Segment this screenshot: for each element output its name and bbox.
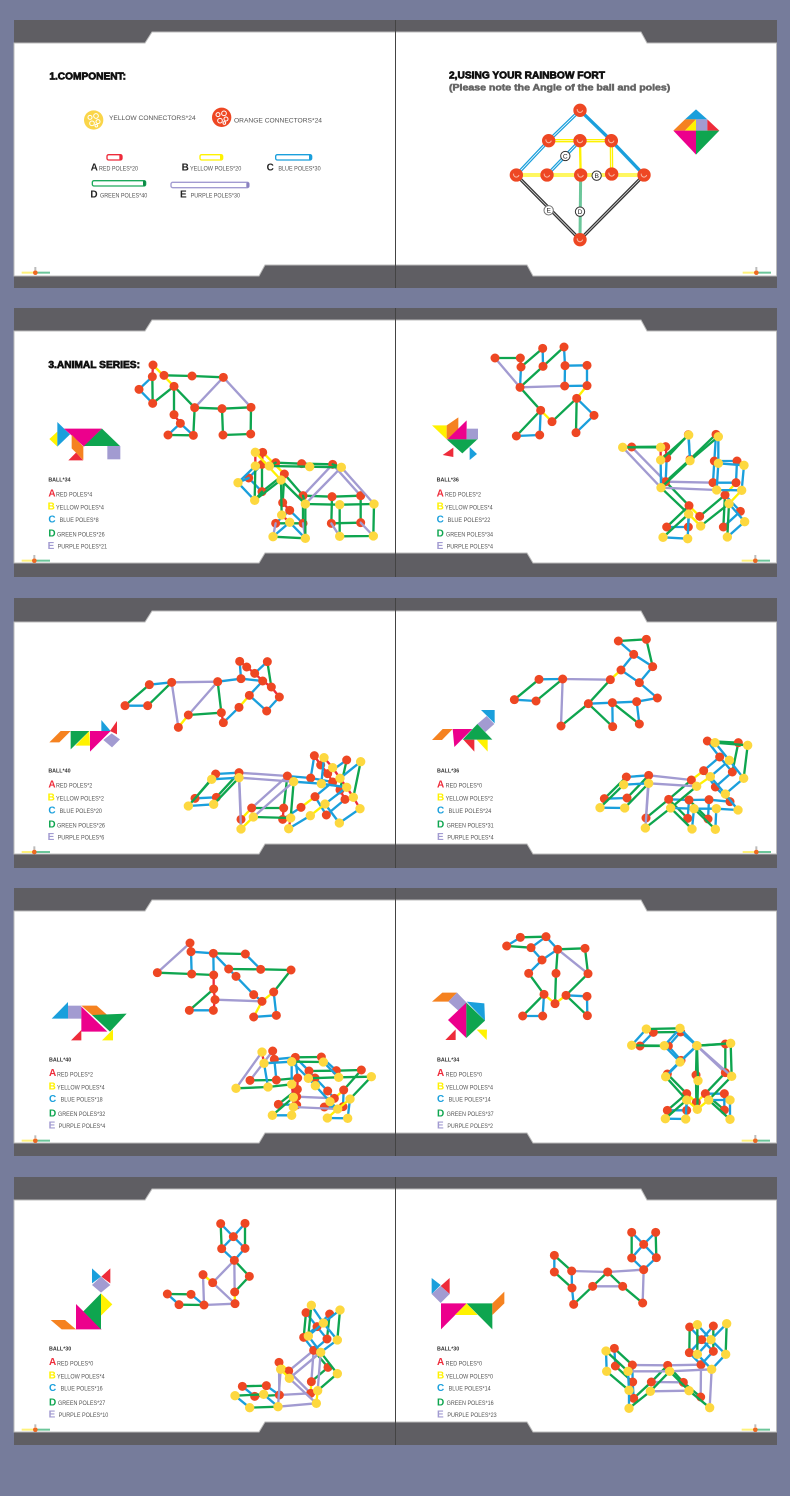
parts list: YELLOW POLES*4 (57, 1374, 105, 1380)
pole B yellow (200, 155, 223, 160)
page marker (22, 846, 50, 854)
parts list: GREEN POLES*16 (447, 1401, 494, 1407)
parts list: BLUE POLES*22 (448, 518, 491, 524)
parts list: BALL*34 (48, 478, 71, 484)
parts list: GREEN POLES*27 (58, 1401, 106, 1407)
parts list: BALL*40 (49, 1057, 71, 1063)
parts list: D (437, 1397, 444, 1408)
label: yellow connectors: YELLOW CONNECTORS*24 (109, 115, 196, 122)
parts list: C (49, 1383, 56, 1394)
panel: bird (432, 347, 770, 563)
page marker (742, 555, 770, 563)
label: orange connectors: ORANGE CONNECTORS*24 (234, 117, 322, 124)
flat model: parrot (507, 937, 588, 1016)
icon: tangram square (673, 109, 719, 155)
3D model: bird (623, 434, 745, 539)
label B: YELLOW POLES*20 (190, 166, 242, 172)
panel: 2 using your rainbow fort (449, 71, 771, 275)
label B: B (182, 163, 189, 174)
page marker (743, 267, 771, 275)
icon: tangram fox (432, 710, 495, 752)
page frame row 5 (14, 1177, 777, 1445)
parts list: B (437, 502, 444, 513)
3D model: wolf (188, 756, 361, 829)
parts list: BLUE POLES*14 (449, 1098, 491, 1104)
3D model: bear (238, 452, 374, 538)
icon: tangram goose (52, 1002, 127, 1040)
parts list: GREEN POLES*37 (447, 1112, 494, 1118)
parts list: BALL*34 (437, 1057, 459, 1063)
parts list: BLUE POLES*20 (60, 809, 103, 815)
parts list: BLUE POLES*24 (449, 809, 492, 815)
parts list: A (437, 488, 444, 499)
flat model: bear (139, 365, 251, 435)
parts list: PURPLE POLES*2 (447, 1124, 494, 1130)
parts list: PURPLE POLES*4 (447, 835, 494, 841)
parts list (437, 769, 494, 843)
diagram: square construction (514, 109, 647, 242)
parts list: BLUE POLES*16 (61, 1387, 103, 1393)
parts list: A (48, 779, 56, 790)
parts list: BALL*36 (437, 769, 459, 775)
label A: RED POLES*20 (99, 166, 139, 172)
label D (90, 190, 148, 201)
page frame row 2 (14, 308, 777, 577)
parts list: BALL*30 (437, 1346, 459, 1352)
parts list (49, 1346, 109, 1421)
parts list: A (48, 488, 56, 499)
flat model: goose (157, 943, 291, 1017)
callout letters: D (578, 209, 583, 216)
page marker (22, 267, 50, 275)
label A: A (91, 163, 98, 174)
parts list: YELLOW POLES*4 (445, 505, 493, 511)
parts list: D (437, 1108, 444, 1119)
pole A red (107, 155, 122, 160)
parts list: D (49, 1397, 56, 1408)
pole D green (92, 181, 146, 186)
parts list: E (437, 541, 444, 552)
parts list (437, 478, 494, 552)
parts list: BALL*40 (48, 769, 71, 775)
parts list: D (48, 820, 56, 831)
parts list: E (48, 832, 55, 843)
3D model: fox (600, 741, 748, 829)
parts list: RED POLES*2 (445, 493, 482, 499)
parts list: A (437, 779, 444, 790)
parts list: E (437, 1121, 444, 1132)
flat model: bird (495, 347, 594, 436)
parts list: YELLOW POLES*4 (57, 1085, 105, 1091)
label D: D (90, 190, 98, 201)
icon: tangram sitting cat (51, 1268, 112, 1329)
page marker (22, 555, 50, 563)
parts list: PURPLE POLES*10 (59, 1413, 109, 1419)
parts list (437, 1057, 494, 1132)
icon: tangram bear (49, 422, 120, 460)
label A (91, 163, 139, 174)
parts list: A (49, 1357, 56, 1368)
parts list: C (437, 805, 444, 816)
panel: wolf (22, 661, 361, 854)
panel: 3 animal series bear (22, 360, 374, 563)
panel: goose (22, 943, 371, 1143)
parts list: E (437, 1410, 444, 1421)
heading: animal series: 3.ANIMAL SERIES: (48, 360, 140, 371)
callout letters: B (594, 173, 599, 180)
parts list: E (49, 1410, 56, 1421)
parts list (48, 769, 106, 843)
parts list: E (49, 1121, 56, 1132)
parts list: PURPLE POLES*4 (59, 1124, 106, 1130)
flat model: wolf (125, 661, 279, 727)
icon: yellow connector (84, 110, 103, 130)
parts list: GREEN POLES*32 (58, 1112, 106, 1118)
page frame row 1 (14, 20, 777, 288)
icon: tangram standing cat (432, 1278, 504, 1329)
parts list: C (437, 514, 444, 525)
parts list: B (437, 1082, 444, 1093)
parts list: PURPLE POLES*21 (58, 544, 108, 550)
3D model: goose (236, 1051, 371, 1118)
parts list: C (49, 1094, 56, 1105)
parts list: RED POLES*2 (56, 784, 93, 790)
flat model: fox (514, 639, 657, 727)
callout letters (544, 151, 601, 216)
parts list: A (49, 1068, 56, 1079)
panel: standing cat (432, 1232, 770, 1432)
parts list: B (48, 793, 55, 804)
parts list (48, 478, 108, 552)
parts list: YELLOW POLES*2 (56, 796, 105, 802)
icon: tangram parrot (432, 993, 487, 1040)
parts list: GREEN POLES*26 (57, 532, 105, 538)
parts list: GREEN POLES*34 (446, 532, 494, 538)
parts list: D (437, 820, 444, 831)
label C (267, 163, 321, 174)
3D model: parrot (632, 1028, 732, 1119)
pole C blue (276, 155, 312, 160)
parts list: B (437, 1371, 444, 1382)
parts list: RED POLES*4 (56, 493, 93, 499)
parts list: C (48, 805, 56, 816)
label C: BLUE POLES*30 (278, 166, 321, 172)
callout letters: C (563, 153, 568, 160)
icon: tangram wolf (49, 720, 120, 752)
parts list: C (437, 1094, 444, 1105)
pole E purple (171, 182, 249, 188)
label C: C (267, 163, 274, 174)
page marker (22, 1424, 50, 1432)
subheading: angle note: (Please note the Angle of the ball and poles) (449, 82, 670, 92)
panel: fox (432, 639, 771, 854)
parts list: RED POLES*2 (57, 1072, 94, 1078)
label E: PURPLE POLES*30 (191, 194, 241, 200)
parts list: C (437, 1383, 444, 1394)
parts list: YELLOW POLES*4 (56, 505, 105, 511)
parts list: A (437, 1357, 444, 1368)
panel: sitting cat (22, 1223, 340, 1432)
parts list: D (49, 1108, 56, 1119)
page marker (742, 1424, 770, 1432)
parts list: YELLOW POLES*0 (446, 1374, 494, 1380)
parts list (437, 1346, 497, 1421)
parts list (49, 1057, 106, 1132)
parts list: YELLOW POLES*2 (446, 796, 494, 802)
parts list: BALL*30 (49, 1346, 71, 1352)
heading: using: 2,USING YOUR RAINBOW FORT (449, 71, 605, 82)
parts list: E (437, 832, 444, 843)
parts list: D (437, 529, 444, 540)
page marker (22, 1135, 50, 1143)
panel: 1 component (22, 71, 322, 275)
label B (182, 163, 242, 174)
3D model: sitting cat (235, 1305, 340, 1408)
panel: parrot (432, 937, 770, 1143)
parts list: D (48, 529, 56, 540)
callout letters: E (546, 208, 551, 215)
parts list: BLUE POLES*8 (60, 518, 99, 524)
heading: component: 1.COMPONENT: (49, 71, 126, 82)
parts list: RED POLES*0 (446, 1361, 483, 1367)
parts list: B (49, 1371, 56, 1382)
label E (180, 190, 241, 201)
icon: orange connector (212, 108, 231, 127)
parts list: BLUE POLES*14 (449, 1387, 491, 1393)
parts list: PURPLE POLES*23 (447, 1413, 497, 1419)
page marker (743, 846, 771, 854)
parts list: RED POLES*0 (57, 1361, 94, 1367)
flat model: sitting cat (167, 1223, 249, 1305)
label E: E (180, 190, 187, 201)
parts list: B (48, 502, 55, 513)
label D: GREEN POLES*40 (100, 194, 148, 200)
parts list: BALL*36 (437, 478, 459, 484)
parts list: C (48, 514, 56, 525)
icon: tangram bird (432, 417, 478, 460)
page frame row 4 (14, 888, 777, 1156)
parts list: RED POLES*0 (446, 1072, 483, 1078)
parts list: A (437, 1068, 444, 1079)
3D model: standing cat (606, 1324, 727, 1408)
parts list: BLUE POLES*18 (61, 1098, 103, 1104)
parts list: B (49, 1082, 56, 1093)
parts list: RED POLES*0 (446, 784, 483, 790)
parts list: PURPLE POLES*6 (58, 835, 105, 841)
parts list: GREEN POLES*31 (447, 823, 494, 829)
flat model: standing cat (554, 1232, 656, 1304)
page marker (742, 1135, 770, 1143)
page frame row 3 (14, 598, 777, 868)
parts list: PURPLE POLES*4 (447, 544, 494, 550)
parts list: YELLOW POLES*4 (446, 1085, 494, 1091)
parts list: B (437, 793, 444, 804)
parts list: GREEN POLES*26 (57, 823, 106, 829)
parts list: E (48, 541, 55, 552)
